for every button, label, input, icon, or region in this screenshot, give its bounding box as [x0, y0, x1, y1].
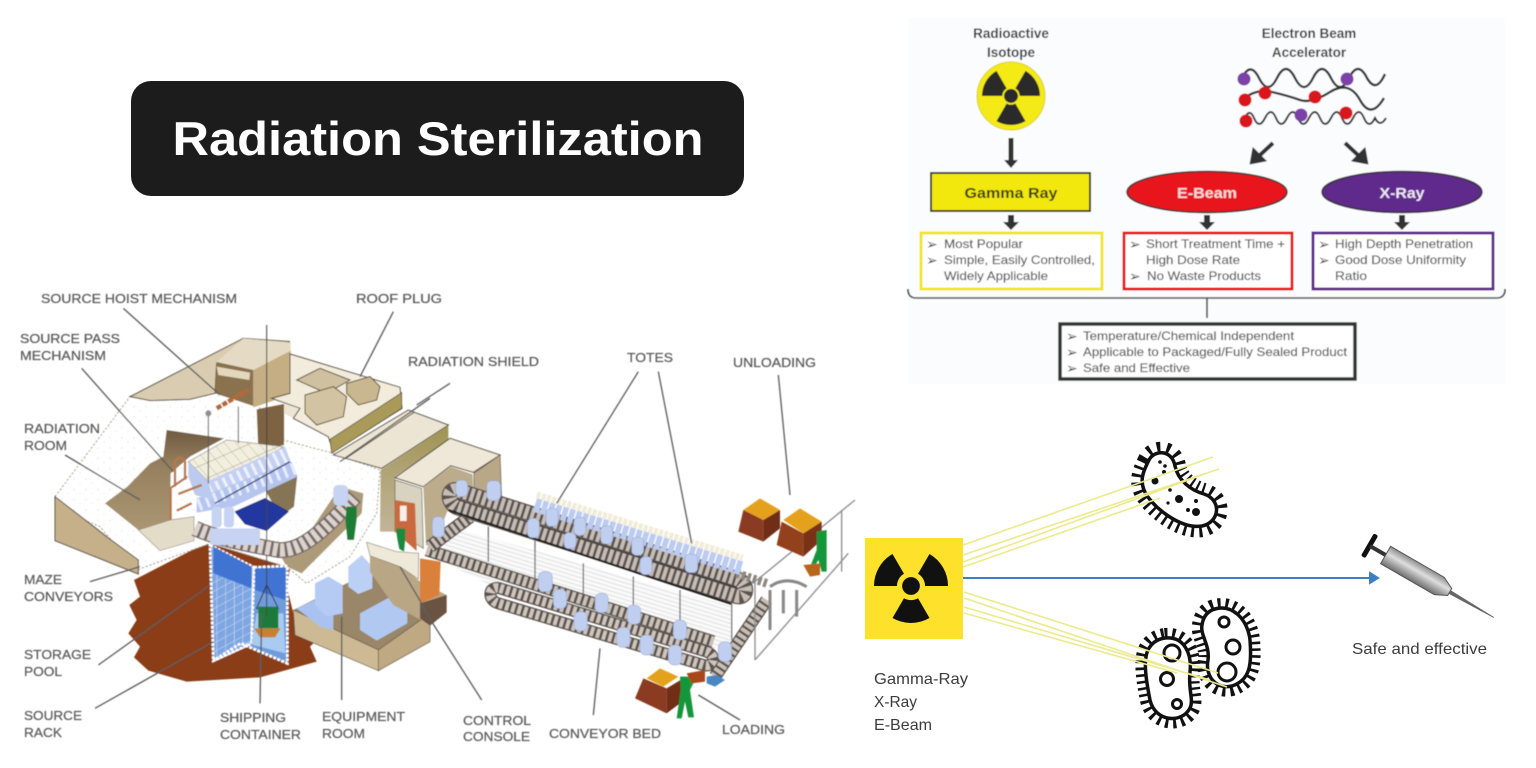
panel: sterilization diagram — [865, 453, 1500, 734]
tan walls — [474, 455, 502, 500]
box: common properties: Temperature/Chemical Independent — [1083, 329, 1295, 343]
upper left structure — [55, 338, 301, 574]
second roof slab — [333, 410, 448, 468]
facility labels: EQUIPMENT — [322, 709, 405, 724]
box: x-ray properties — [1313, 233, 1493, 289]
maze conveyor — [195, 497, 355, 550]
third roof — [395, 438, 500, 487]
small arrows — [1003, 215, 1410, 230]
arrow: blue through-beam — [963, 573, 1378, 583]
safety fence — [755, 500, 855, 660]
facility labels: ROOM — [322, 726, 365, 741]
lower oval conveyor — [490, 588, 713, 666]
facility labels: ROOM — [24, 438, 67, 453]
box: x-ray properties: Good Dose Uniformity — [1335, 253, 1466, 267]
box: common properties: Safe and Effective — [1083, 361, 1190, 375]
facility labels: MAZE — [24, 572, 62, 587]
facility labels: CONTAINER — [220, 727, 301, 742]
loading tote — [707, 675, 725, 687]
maze totes — [210, 485, 348, 545]
title banner — [131, 81, 744, 196]
main building — [333, 410, 502, 626]
box: gamma properties: ➢ — [926, 237, 938, 253]
pallet two — [777, 508, 822, 557]
source pass mechanism — [171, 457, 202, 520]
console floor — [370, 555, 447, 625]
facility labels: CONTROL — [463, 713, 531, 728]
facility building illustration — [55, 308, 855, 720]
heading: electron beam accelerator: Electron Beam — [1262, 26, 1356, 41]
icon: bacterium top — [1142, 453, 1217, 526]
conveyor supports — [488, 527, 732, 640]
box: gamma properties — [921, 233, 1102, 289]
icon: radiation symbol — [977, 62, 1045, 130]
panel: irradiation facility cutaway — [20, 291, 855, 744]
box: e-beam properties: ➢ — [1129, 269, 1141, 285]
stack left face — [188, 462, 213, 500]
box: x-ray properties: ➢ — [1318, 253, 1330, 269]
building ramp conveyor — [430, 517, 470, 547]
equipment blocks — [297, 600, 333, 630]
box: x-ray properties: Ratio — [1335, 269, 1367, 283]
facility labels: TOTES — [627, 350, 673, 365]
box: e-beam properties — [1124, 233, 1292, 289]
box: x-ray properties: High Depth Penetration — [1335, 237, 1473, 251]
box: e-beam properties: Short Treatment Time + — [1146, 237, 1285, 251]
bracket — [908, 289, 1505, 318]
ramp conveyor — [715, 600, 767, 677]
unloading cart — [803, 563, 820, 577]
hoist hood top — [217, 338, 291, 370]
console base — [420, 595, 447, 626]
x-ray ellipse: X-Ray — [1380, 186, 1424, 202]
roof plug slab — [272, 354, 402, 452]
facility labels: RACK — [24, 725, 62, 740]
facility labels: RADIATION — [24, 421, 100, 436]
storage pool — [128, 542, 317, 682]
stack upper band — [207, 447, 291, 500]
equipment room — [293, 570, 430, 671]
recess — [263, 475, 297, 517]
heading: radioactive isotope: Isotope — [987, 45, 1035, 60]
leader lines left — [65, 308, 433, 708]
box: e-beam properties: ➢ — [1129, 237, 1141, 253]
facility labels: LOADING — [722, 722, 785, 737]
maze floor — [280, 487, 363, 573]
olive fascia — [380, 426, 448, 532]
heading: electron beam accelerator: Accelerator — [1272, 45, 1347, 60]
door frame — [395, 480, 423, 548]
source rack recess and tote stack — [171, 390, 297, 531]
orange cabinet — [420, 558, 441, 603]
icon: syringe — [1361, 533, 1500, 629]
radiation room wall — [105, 430, 224, 530]
icon: bacterium lower left — [1145, 638, 1191, 718]
x-ray ellipse — [1322, 172, 1482, 212]
loading box — [687, 670, 705, 683]
left slab side — [55, 497, 138, 574]
box: e-beam properties: High Dose Rate — [1146, 253, 1240, 267]
blue source box — [235, 498, 288, 531]
caption: safe and effective: Safe and effective — [1352, 641, 1487, 658]
unloading worker — [808, 530, 827, 572]
box: common properties: Applicable to Packaged/Fully Sealed Product — [1083, 345, 1348, 359]
box: common properties — [1060, 324, 1355, 379]
facility labels: ROOF PLUG — [356, 291, 442, 306]
conveyor section — [417, 372, 855, 720]
title banner: Radiation Sterilization — [172, 112, 704, 165]
icon: electron beam waves — [1238, 69, 1386, 128]
hoist and cables — [217, 390, 248, 408]
icon: radiation square — [865, 538, 963, 639]
facility labels: STORAGE — [24, 647, 91, 662]
central cable — [265, 325, 268, 617]
e-beam ellipse — [1127, 172, 1287, 212]
rays: lower — [964, 592, 1227, 687]
roof plugs — [297, 368, 350, 393]
facility labels — [20, 291, 816, 744]
gamma ray box: Gamma Ray — [964, 186, 1058, 202]
box: common properties: ➢ — [1066, 345, 1078, 361]
hoist hood front — [215, 362, 253, 406]
hatched guard area — [440, 527, 732, 648]
e-beam ellipse: E-Beam — [1177, 186, 1237, 202]
console — [367, 542, 419, 579]
loading worker — [677, 677, 697, 718]
concrete cut walls — [55, 393, 380, 583]
room floor — [138, 517, 194, 551]
rays: upper — [963, 457, 1219, 567]
cables — [208, 407, 238, 483]
facility labels: CONSOLE — [463, 729, 530, 744]
arrow: accelerator to x-ray — [1345, 143, 1366, 162]
upper conveyor — [450, 490, 745, 596]
roof wedge — [130, 338, 290, 401]
loading pallet — [635, 668, 683, 713]
radiation types list: X-Ray — [874, 694, 917, 711]
heading: radioactive isotope: Radioactive — [973, 26, 1049, 41]
box: common properties: ➢ — [1066, 361, 1078, 377]
facility labels: SOURCE HOIST MECHANISM — [41, 291, 237, 306]
hoist shaft — [257, 404, 284, 451]
pallet one — [738, 498, 780, 542]
box: x-ray properties: ➢ — [1318, 237, 1330, 253]
arrow: accelerator to e-beam — [1252, 143, 1273, 162]
upper tail — [737, 573, 767, 583]
gamma ray box — [931, 173, 1090, 211]
worker in maze — [345, 507, 357, 540]
box: common properties: ➢ — [1066, 329, 1078, 345]
leader lines right — [417, 372, 790, 720]
box: gamma properties: Simple, Easily Controlled, — [944, 253, 1095, 267]
radiation types list — [874, 671, 968, 734]
shaft walls — [210, 545, 254, 661]
facility labels: POOL — [24, 664, 62, 679]
left building section — [55, 308, 502, 708]
tote row back — [535, 505, 742, 568]
facility labels: SHIPPING — [220, 710, 286, 725]
panel: radiation sources flowchart — [908, 18, 1505, 384]
box: e-beam properties: No Waste Products — [1147, 269, 1261, 283]
stack top — [188, 440, 283, 483]
source rack hanger — [257, 585, 278, 608]
facility labels: MECHANISM — [20, 348, 106, 363]
lower conveyor run — [427, 550, 713, 642]
radiation types list: E-Beam — [874, 717, 932, 734]
facility labels: SOURCE — [24, 708, 82, 723]
box: gamma properties: Widely Applicable — [944, 269, 1048, 283]
door — [395, 500, 417, 551]
icon: bacterium lower right — [1202, 608, 1251, 687]
individual totes — [432, 480, 732, 665]
facility labels: SOURCE PASS — [20, 331, 120, 346]
radiation types list: Gamma-Ray — [874, 671, 968, 688]
facility labels: UNLOADING — [733, 355, 816, 370]
hoist hood side — [253, 351, 291, 407]
unloading table — [770, 581, 807, 630]
facility labels: CONVEYOR BED — [549, 726, 661, 741]
stack lower band — [197, 462, 297, 513]
facility labels: CONVEYORS — [24, 589, 113, 604]
facility labels: RADIATION SHIELD — [408, 354, 539, 369]
arrow: isotope to gamma — [1004, 138, 1018, 168]
door worker — [396, 528, 405, 552]
box: gamma properties: ➢ — [926, 253, 938, 269]
box: gamma properties: Most Popular — [944, 237, 1023, 251]
